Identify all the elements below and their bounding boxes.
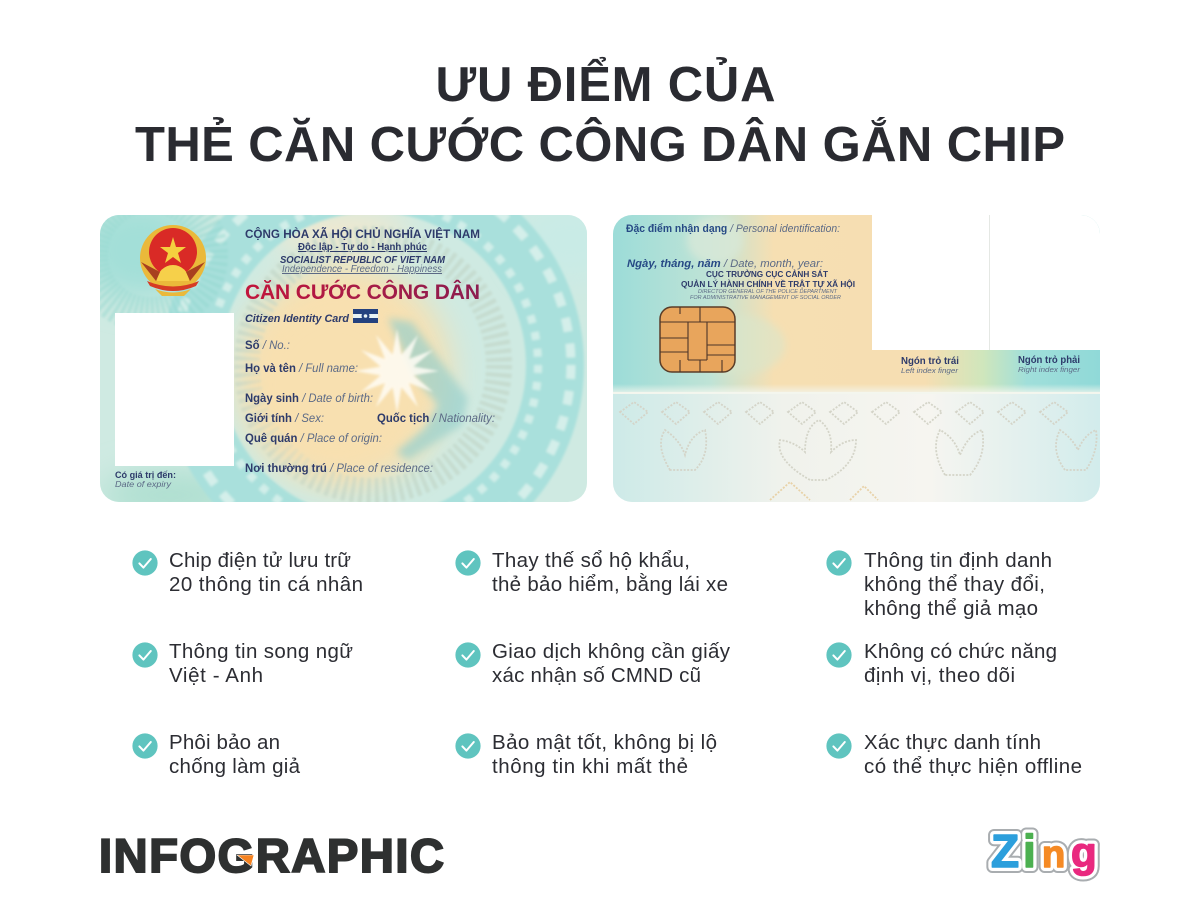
benefit: replaces documents: Thay thế sổ hộ khẩu, [492,549,690,572]
benefit: security [455,731,717,778]
logo: zing: g [1071,829,1097,876]
card front fields: Quốc tịch / Nationality: [377,413,495,425]
benefit: transactions: xác nhận số CMND cũ [492,664,701,687]
card front fields: Số / No.: [245,340,290,352]
logo: zing: Z [991,825,1019,877]
benefit: no tracking [826,640,1057,687]
logo: zing: g [1071,829,1097,876]
card front fields [115,340,495,489]
lotus pattern [620,402,1097,500]
benefit: anti-counterfeit: chống làm giả [169,755,301,778]
card front header text: CỘNG HÒA XÃ HỘI CHỦ NGHĨA VIỆT NAM [245,228,480,241]
benefit: identity: Thông tin định danh [864,549,1052,572]
card front header text: CĂN CƯỚC CÔNG DÂN [245,280,480,304]
logo: zing: Z [991,825,1019,877]
benefit: transactions: Giao dịch không cần giấy [492,640,731,663]
lower band [613,394,1100,502]
card back text: Ngón trỏ trái [901,356,959,367]
title [135,57,1065,172]
icon: national emblem [140,225,206,296]
title: THẺ CĂN CƯỚC CÔNG DÂN GẮN CHIP [135,117,1065,172]
benefit: security: Bảo mật tốt, không bị lộ [492,731,717,754]
card front fields: Quê quán / Place of origin: [245,433,382,445]
benefit: replaces documents [455,549,728,596]
card back text: Đặc điểm nhận dạng / Personal identification: [626,223,840,235]
fingerprint boxes [872,215,1100,350]
benefit: replaces documents: thẻ bảo hiểm, bằng lái xe [492,573,728,596]
photo placeholder [115,313,234,466]
card front fields: Ngày sinh / Date of birth: [245,393,373,405]
benefit: security: thông tin khi mất thẻ [492,755,688,778]
logo: zing [991,825,1097,877]
card front header text [245,228,480,325]
list: column 2 [455,549,731,778]
star [355,329,439,413]
card back text: Ngón trỏ phải [1018,355,1080,366]
benefit: offline: Xác thực danh tính [864,731,1041,754]
card back text: DIRECTOR GENERAL OF THE POLICE DEPARTMENT [698,289,838,295]
panel: card back [613,215,1100,502]
benefit: offline [826,731,1082,778]
title: ƯU ĐIỂM CỦA [436,57,776,112]
logo: zing: i [1023,825,1036,877]
benefit: anti-counterfeit: Phôi bảo an [169,731,280,754]
benefit: bilingual [132,640,353,687]
card back text [626,223,1081,375]
card front header text: Độc lập - Tự do - Hạnh phúc [298,242,427,253]
logo: zing: n [1042,834,1065,876]
benefit: transactions [455,640,731,687]
logo: zing: i [1023,825,1036,877]
list: column 3 [826,549,1082,778]
benefit: chip: 20 thông tin cá nhân [169,573,363,596]
benefit: identity [826,549,1052,620]
card front fields: Có giá trị đến: [115,470,176,480]
card front fields: Giới tính / Sex: [245,413,324,425]
logo: zing: i [1023,825,1036,877]
icon: chip [660,307,735,372]
benefit: no tracking: định vị, theo dõi [864,664,1015,687]
card back text: FOR ADMINISTRATIVE MANAGEMENT OF SOCIAL ORDER [690,295,841,301]
benefit: identity: không thể thay đổi, [864,573,1045,596]
benefit: no tracking: Không có chức năng [864,640,1057,663]
logo: zing: g [1071,829,1097,876]
pale lotus over teal area [687,216,785,375]
benefit: bilingual: Việt - Anh [169,664,263,687]
card front fields: Date of expiry [115,479,172,489]
map of Vietnam [388,318,468,460]
benefit: chip [132,549,363,596]
benefit: identity: không thể giả mạo [864,597,1038,620]
logo: zing: n [1042,834,1065,876]
card back text: QUẢN LÝ HÀNH CHÍNH VỀ TRẬT TỰ XÃ HỘI [681,279,855,289]
card back text: CỤC TRƯỞNG CỤC CẢNH SÁT [706,270,828,279]
panel: card front [100,215,587,502]
card front header text: Independence - Freedom - Happiness [282,264,442,275]
benefit: bilingual: Thông tin song ngữ [169,640,353,663]
card front fields: Nơi thường trú / Place of residence: [245,463,433,475]
card front header text: SOCIALIST REPUBLIC OF VIET NAM [280,255,446,266]
peach centre, keeps the text zone warm [242,323,356,484]
benefit: chip: Chip điện tử lưu trữ [169,549,351,572]
card front fields: Họ và tên / Full name: [245,363,358,375]
drum pattern [100,215,585,502]
logo: zing: n [1042,834,1065,876]
card back text: Right index finger [1018,365,1081,374]
card back text: Left index finger [901,366,959,375]
icon: chip symbol [353,309,378,323]
logo: infographic: INFOGRAPHIC [99,829,444,882]
benefit: offline: có thể thực hiện offline [864,755,1082,778]
card back text: Ngày, tháng, năm / Date, month, year: [627,258,823,270]
card front header text: Citizen Identity Card [245,313,349,325]
benefit: anti-counterfeit [132,731,301,778]
list: column 1 [132,549,363,778]
logo: zing: Z [991,825,1019,877]
